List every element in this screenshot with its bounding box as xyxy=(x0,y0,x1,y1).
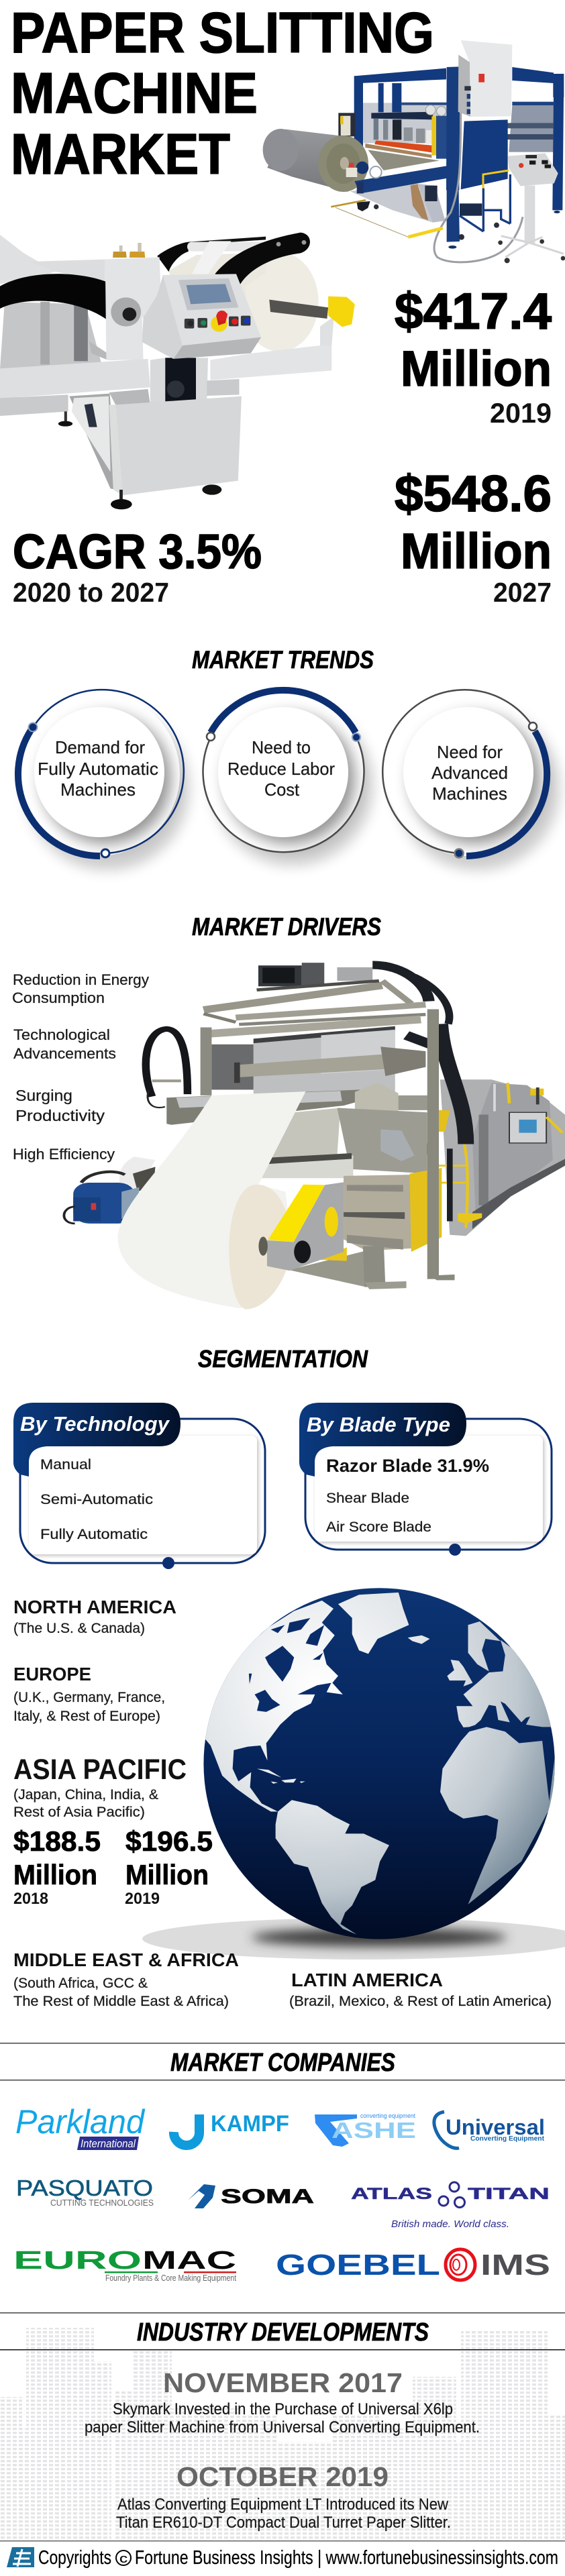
stat: CAGR: 2020 to 2027 xyxy=(13,577,169,608)
stat: asia pacific 2018 value: $188.5 xyxy=(13,1825,101,1857)
trend circle: need to reduce labor cost: Cost xyxy=(264,780,300,800)
panel: by technology xyxy=(13,1403,265,1569)
logo: Atlas Titan xyxy=(351,2182,550,2230)
development: November 2017: NOVEMBER 2017 xyxy=(163,2367,403,2398)
stat: asia pacific 2019 value xyxy=(125,1825,213,1908)
title xyxy=(11,1,434,186)
stat: asia pacific 2018 value: Million xyxy=(13,1859,97,1890)
logo: Euromac xyxy=(13,2247,236,2283)
stat: asia pacific 2018 value xyxy=(13,1825,101,1908)
panel: regions list: EUROPE xyxy=(13,1664,91,1684)
trend circle: need for advanced machines: Advanced xyxy=(431,763,508,783)
panel: regions list: Italy, & Rest of Europe) xyxy=(13,1709,160,1724)
image: blue paper slitting machine xyxy=(263,40,565,263)
trend circle: need for advanced machines: Machines xyxy=(432,784,507,804)
logo: Ashe: ASHE xyxy=(331,2118,416,2143)
stat: 2027 market value: Million xyxy=(401,523,552,579)
panel: by blade type: Shear Blade xyxy=(326,1491,409,1506)
logo: Kampf xyxy=(174,2111,289,2145)
logo: Atlas Titan: TITAN xyxy=(468,2185,550,2203)
panel: middle east and africa: The Rest of Middle East & Africa) xyxy=(13,1994,229,2009)
logo: Euromac: EURO xyxy=(13,2247,142,2275)
development: November 2017: Skymark Invested in the Purchase of Universal X6lp xyxy=(113,2400,453,2418)
panel: market drivers list: High Efficiency xyxy=(13,1146,115,1163)
logo: Euromac: MAC xyxy=(142,2247,236,2275)
stat: asia pacific 2019 value: 2019 xyxy=(125,1890,160,1908)
panel: by technology: Fully Automatic xyxy=(40,1527,148,1542)
stat: 2027 market value: 2027 xyxy=(493,577,552,608)
panel: middle east and africa xyxy=(13,1949,239,2009)
panel: market drivers list: Productivity xyxy=(15,1107,105,1124)
panel: latin america: LATIN AMERICA xyxy=(291,1970,443,1990)
logo: Soma xyxy=(188,2184,314,2208)
logo: Atlas Titan: ATLAS xyxy=(351,2185,432,2203)
heading: industry developments: INDUSTRY DEVELOPMENTS xyxy=(137,2318,429,2347)
panel: latin america xyxy=(289,1970,552,2009)
trend circle: need to reduce labor cost: Need to xyxy=(252,737,311,757)
image: grey paper slitting machine with control panel xyxy=(0,233,355,509)
logo: Ashe: converting equipment xyxy=(360,2112,415,2119)
panel: market trends circles xyxy=(16,690,560,870)
trend circle: need for advanced machines: Need for xyxy=(437,742,503,762)
panel: market drivers list: Reduction in Energy xyxy=(13,971,149,988)
logo: Goebel IMS: GOEBEL xyxy=(276,2249,440,2282)
heading: market trends: MARKET TRENDS xyxy=(192,646,374,674)
stat: CAGR: CAGR 3.5% xyxy=(13,525,262,579)
panel: regions list: (U.K., Germany, France, xyxy=(13,1690,165,1705)
stat: asia pacific 2018 value: 2018 xyxy=(13,1890,48,1908)
logo: Pasquato: CUTTING TECHNOLOGIES xyxy=(50,2198,154,2208)
logo: Goebel IMS xyxy=(276,2249,550,2282)
logo: Universal: Universal xyxy=(446,2115,545,2139)
panel: by technology: Semi-Automatic xyxy=(40,1492,153,1507)
development: November 2017 xyxy=(85,2367,480,2436)
stat: CAGR xyxy=(13,525,262,608)
logo: Pasquato xyxy=(16,2176,154,2208)
footer xyxy=(0,2540,565,2576)
stat: 2019 market value xyxy=(395,283,552,429)
stat: asia pacific 2019 value: Million xyxy=(125,1859,209,1890)
logo: Pasquato: PASQUATO xyxy=(16,2176,153,2200)
logo: Atlas Titan: British made. World class. xyxy=(391,2218,509,2230)
panel: regions list: (The U.S. & Canada) xyxy=(13,1621,145,1636)
logo: Euromac: Foundry Plants & Core Making Equipment xyxy=(105,2273,236,2283)
panel: market drivers list: Advancements xyxy=(13,1045,116,1062)
trend circle: need to reduce labor cost xyxy=(203,690,373,865)
stat: 2027 market value: $548.6 xyxy=(395,466,552,523)
trend circle: demand for fully automatic machines: Machines xyxy=(60,780,136,800)
panel: regions list: (Japan, China, India, & xyxy=(13,1787,158,1803)
image: globe xyxy=(199,1588,558,1939)
title: MACHINE xyxy=(11,62,258,125)
heading: segmentation: SEGMENTATION xyxy=(198,1345,368,1373)
logo: Goebel IMS: IMS xyxy=(480,2249,550,2282)
panel: by blade type: Air Score Blade xyxy=(326,1519,431,1535)
logo: Soma: SOMA xyxy=(221,2186,314,2208)
panel: market drivers list: Technological xyxy=(13,1026,110,1043)
trend circle: demand for fully automatic machines xyxy=(16,690,189,870)
logo: Parkland International: International xyxy=(81,2137,136,2150)
panel: market drivers list: Surging xyxy=(15,1087,72,1104)
development: November 2017: paper Slitter Machine from Universal Converting Equipment. xyxy=(85,2418,480,2436)
stat: 2019 market value: $417.4 xyxy=(395,283,552,340)
panel: regions list: Rest of Asia Pacific) xyxy=(13,1805,145,1820)
development: October 2019: Titan ER610-DT Compact Dual Turret Paper Slitter. xyxy=(116,2514,451,2532)
header tab: by technology xyxy=(13,1403,181,1477)
footer: c xyxy=(119,2552,127,2565)
panel: by technology: Manual xyxy=(40,1457,91,1472)
panel: regions list xyxy=(13,1597,187,1820)
globe floor shadow xyxy=(142,1918,565,1960)
heading: market drivers: MARKET DRIVERS xyxy=(192,913,381,941)
title: MARKET xyxy=(11,123,230,186)
logo: Ashe xyxy=(315,2112,416,2147)
stat: asia pacific 2019 value: $196.5 xyxy=(125,1825,213,1857)
header tab: by blade type: By Blade Type xyxy=(307,1413,450,1436)
development: October 2019: OCTOBER 2019 xyxy=(176,2461,389,2492)
panel: by blade type xyxy=(299,1403,552,1556)
stat: 2019 market value: Million xyxy=(401,341,552,396)
icon: Fortune Business Insights logo xyxy=(7,2547,34,2567)
trend circle: demand for fully automatic machines: Demand for xyxy=(55,737,145,757)
stat: 2019 market value: 2019 xyxy=(490,397,552,429)
header tab: by technology: By Technology xyxy=(20,1412,170,1436)
stat: 2027 market value xyxy=(395,466,552,608)
trend circle: need to reduce labor cost: Reduce Labor xyxy=(227,759,335,779)
header tab: by blade type xyxy=(299,1403,466,1477)
panel: latin america: (Brazil, Mexico, & Rest of Latin America) xyxy=(289,1994,552,2009)
panel: market drivers list xyxy=(12,971,149,1163)
image: large paper coating line with roll xyxy=(64,963,565,1309)
heading: market companies: MARKET COMPANIES xyxy=(170,2049,395,2077)
trend circle: demand for fully automatic machines: Fully Automatic xyxy=(38,759,158,779)
logo: Parkland International: Parkland xyxy=(15,2103,146,2141)
development: October 2019: Atlas Converting Equipment LT Introduced its New xyxy=(117,2496,449,2514)
panel: regions list: ASIA PACIFIC xyxy=(13,1754,187,1786)
panel: by blade type: Razor Blade 31.9% xyxy=(326,1456,489,1476)
trend circle: need for advanced machines xyxy=(382,690,560,870)
background: city skyline xyxy=(0,2328,565,2540)
logo: Kampf: KAMPF xyxy=(211,2111,289,2137)
panel: middle east and africa: (South Africa, GCC & xyxy=(13,1976,148,1991)
footer: Copyrights xyxy=(38,2547,111,2569)
panel: market drivers list: Consumption xyxy=(12,989,105,1006)
panel: middle east and africa: MIDDLE EAST & AFRICA xyxy=(13,1949,239,1970)
logo: Universal: Converting Equipment xyxy=(470,2135,545,2143)
development: October 2019 xyxy=(116,2461,451,2532)
panel: regions list: NORTH AMERICA xyxy=(13,1597,176,1617)
title: PAPER SLITTING xyxy=(11,1,434,65)
logo: Universal xyxy=(434,2112,545,2148)
